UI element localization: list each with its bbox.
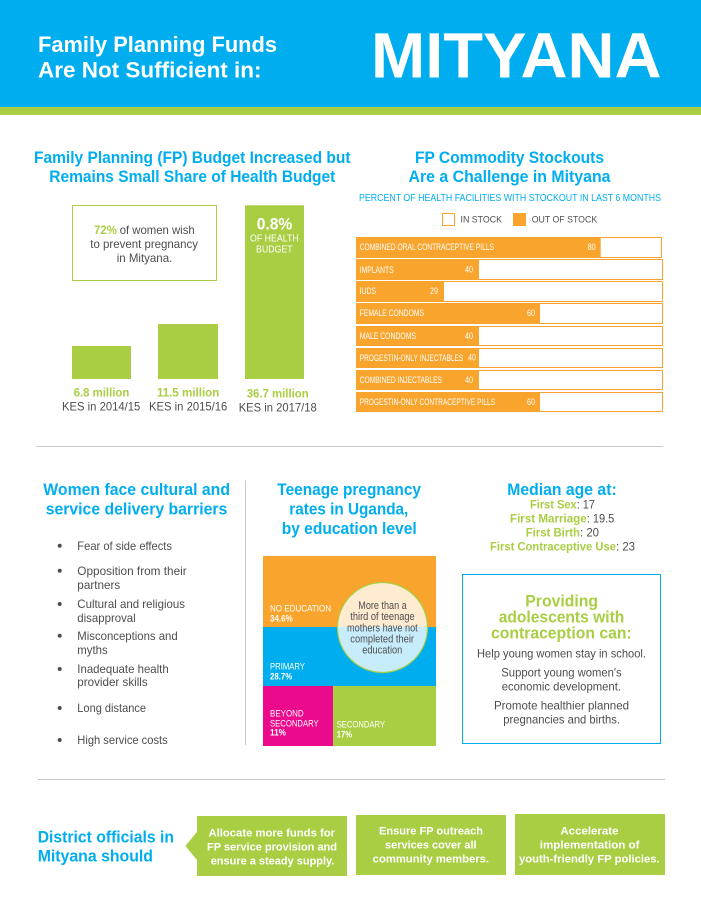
segment: secondary: SECONDARY [337,720,386,731]
segment: secondary: 17% [337,730,352,741]
bullet list: barriers: partners [77,578,120,592]
header banner [0,0,701,115]
bar chart: FP budget [62,205,317,415]
heading: FP budget: Family Planning (FP) Budget Increased but [34,149,351,167]
median age list [490,498,635,554]
panel heading [491,592,632,643]
bullet list: barriers: High service costs [77,733,168,747]
heading: district officials: Mityana should [38,847,153,866]
recommendation: allocate funds [185,816,347,876]
segment: beyond secondary: BEYOND [270,709,304,720]
callout: 72% of women: 72% [94,223,117,237]
chart subtitle: PERCENT OF HEALTH FACILITIES WITH STOCKOUT IN LAST 6 MONTHS [359,193,661,204]
row: IUDs: IUDS [360,286,376,296]
panel body text: Help young women stay in school. [477,647,646,661]
bar: 2017/18: 36.7 million [247,387,309,401]
row: progestin-only pills [356,392,662,412]
bullet list: barriers: Misconceptions and [77,629,178,643]
panel body text: pregnancies and births. [503,713,620,727]
heading: barriers: Women face cultural and [43,481,230,499]
row: female condoms: FEMALE CONDOMS [360,308,424,318]
circle callout: completed their [350,634,414,646]
row: progestin-only injectables: 40 [468,352,476,364]
bar: 2014/15: 6.8 million [74,386,129,400]
callout: 72% of women: of women wish [120,223,195,237]
segment: beyond secondary [263,686,333,746]
recommendation: allocate funds: FP service provision and [207,842,337,854]
bullet list: barriers: Long distance [77,701,146,715]
panel body text [477,647,646,727]
header subtitle [38,32,277,82]
heading: district officials: District officials in [38,828,174,847]
recommendation: youth-friendly policies: youth-friendly FP policies. [519,854,660,866]
median age list: : 23 [616,540,635,554]
row: combined injectables [356,370,662,390]
row: combined injectables: COMBINED INJECTABLES [360,375,442,385]
bullet list: barriers: Opposition from their [77,564,187,578]
bullet list: barriers: Cultural and religious [77,597,185,611]
header title: Mityana: MITYANA [371,20,662,92]
bar: 2014/15 [62,346,141,414]
heading: commodity stockouts [408,149,611,186]
bar: 2017/18: 0.8% [257,214,292,233]
panel heading: Providing [525,592,598,611]
median age list: First Sex [530,498,577,512]
row: IUDs: 29 [430,286,438,297]
heading: median age: Median age at: [507,480,617,499]
bullet list: barriers [58,539,187,747]
panel: providing adolescents with contraception [462,574,660,744]
median age list: : 17 [577,498,595,512]
heading: barriers [43,481,230,519]
row: combined oral pills [356,237,662,258]
stacked bar chart: stockouts [356,237,662,412]
segment: primary: PRIMARY [270,661,306,672]
row: male condoms: 40 [465,331,473,342]
circle callout: third of teenage [350,611,415,623]
heading: commodity stockouts: FP Commodity Stockouts [415,149,604,167]
panel heading: adolescents with [499,608,624,627]
recommendation: youth-friendly policies: Accelerate [560,826,618,838]
legend: OUT OF STOCK [532,214,598,226]
row: implants: IMPLANTS [360,265,394,275]
segment: no education [263,556,436,627]
recommendation: allocate funds: ensure a steady supply. [211,856,334,868]
heading: barriers: service delivery barriers [46,501,227,519]
circle callout: education [362,645,402,657]
legend [442,213,598,226]
header subtitle: Are Not Sufficient in: [38,58,262,82]
row: progestin-only pills: 60 [527,397,535,408]
row: implants [356,259,662,280]
bar: 2015/16: KES in 2015/16 [149,400,228,414]
row: implants: 40 [465,264,473,276]
recommendation: allocate funds: Allocate more funds for [208,828,336,840]
bullet list: barriers: Inadequate health [77,662,169,676]
recommendation: outreach services [356,815,506,875]
bar: 2014/15: KES in 2014/15 [62,400,141,414]
heading: teenage pregnancy: Teenage pregnancy [277,481,422,499]
median age list: First Marriage [510,512,587,526]
circle callout [338,582,428,672]
segment: no education: NO EDUCATION [270,604,331,615]
median age list: : 19.5 [587,512,615,526]
bullet list: barriers: Fear of side effects [77,539,172,553]
segment: beyond secondary: 11% [270,728,286,739]
bullet list: barriers: disapproval [77,611,136,625]
circle callout: mothers have not [347,622,418,634]
bar: 2017/18: BUDGET [256,244,293,256]
panel body text: Support young women's [501,666,622,680]
median age list: : 20 [580,526,599,540]
bar: 2017/18 [239,205,317,415]
heading: FP budget: Remains Small Share of Health Budget [49,168,336,186]
callout: 72% of women: to prevent pregnancy [90,237,198,251]
callout: 72% of women: in Mityana. [117,251,172,265]
median age list: First Contraceptive Use [490,540,616,554]
row: male condoms [356,326,662,346]
heading: teenage pregnancy: rates in Uganda, [289,501,408,519]
row: IUDs [356,281,662,302]
row: progestin-only injectables: PROGESTIN-ONLY INJECTABLES [360,353,463,363]
legend: IN STOCK [460,214,503,226]
header subtitle: Family Planning Funds [38,32,277,57]
bar: 2017/18: OF HEALTH [250,233,299,245]
row: male condoms: MALE CONDOMS [360,331,416,341]
circle callout: More than a [358,600,407,612]
segment: primary [263,627,436,686]
panel heading: contraception can: [491,624,632,643]
row: female condoms: 60 [527,308,535,319]
heading: FP budget [34,149,351,186]
row: combined oral pills: COMBINED ORAL CONTRACEPTIVE PILLS [360,242,494,252]
segment: beyond secondary: SECONDARY [270,719,319,730]
segment: secondary [333,686,436,746]
bar: 2017/18: KES in 2017/18 [239,401,317,415]
heading: commodity stockouts: Are a Challenge in Mityana [408,168,611,186]
treemap: education level [263,556,436,746]
row: progestin-only pills: PROGESTIN-ONLY CONTRACEPTIVE PILLS [360,397,495,407]
panel body text: economic development. [502,680,621,694]
bar: 2015/16 [149,324,228,414]
bullet list: barriers: provider skills [77,675,148,689]
bar: 2015/16: 11.5 million [157,386,219,400]
panel body text: Promote healthier planned [494,699,629,713]
median age list: First Birth [526,526,580,540]
segment: primary: 28.7% [270,671,293,682]
row: female condoms [356,303,662,324]
recommendation: outreach services: services cover all [385,840,477,852]
segment: no education: 34.6% [270,614,293,625]
recommendation: youth-friendly policies [515,814,665,875]
heading: teenage pregnancy: by education level [282,520,417,538]
recommendation: youth-friendly policies: implementation of [540,840,640,852]
recommendation: outreach services: Ensure FP outreach [379,826,483,838]
heading: teenage pregnancy [277,481,422,538]
row: combined injectables: 40 [465,375,473,386]
callout: 72% of women [72,206,216,280]
recommendation: outreach services: community members. [373,854,489,866]
row: progestin-only injectables [356,348,662,368]
bullet list: barriers: myths [77,643,108,657]
heading: district officials [38,828,174,866]
row: combined oral pills: 80 [588,242,596,253]
